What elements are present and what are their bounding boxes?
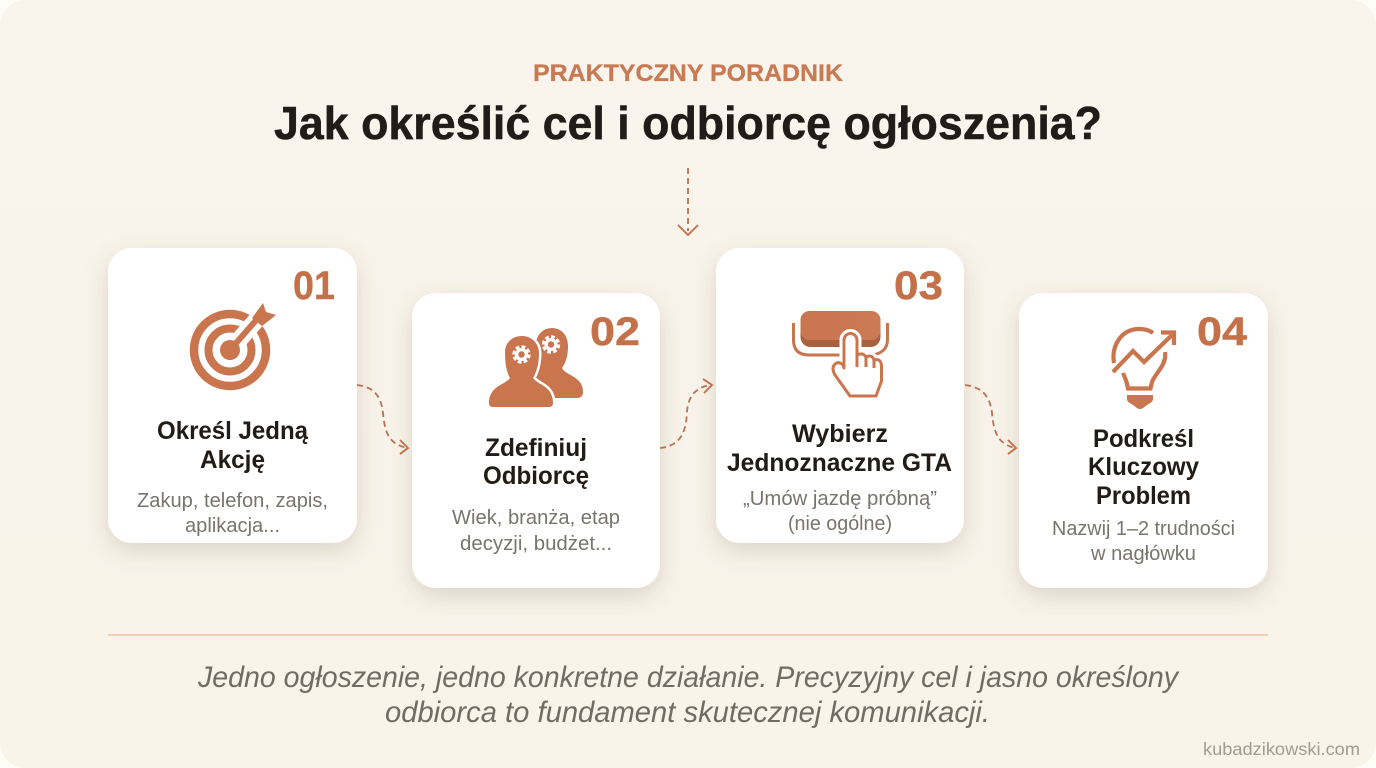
panel: step 04 xyxy=(1019,293,1268,588)
step heading: Określ Jedną xyxy=(157,417,309,445)
step description: „Umów jazdę próbną” xyxy=(743,488,937,510)
step description xyxy=(1052,518,1235,565)
step heading: Akcję xyxy=(200,446,265,474)
panel: step 01 xyxy=(108,248,357,543)
step heading xyxy=(157,417,309,474)
icon: light bulb with growth arrow xyxy=(1113,329,1174,409)
step description: (nie ogólne) xyxy=(788,513,892,535)
step heading: Kluczowy xyxy=(1088,453,1199,481)
icon: hand pressing button xyxy=(794,311,888,396)
step heading: Zdefiniuj xyxy=(485,434,587,462)
arrow: step 01 to 02 xyxy=(357,385,408,454)
step number 01: 01 xyxy=(293,264,335,308)
step description xyxy=(137,490,328,537)
closing statement: Jedno ogłoszenie, jedno konkretne działanie. Precyzyjny cel i jasno określony xyxy=(197,661,1180,694)
panel: step 02 xyxy=(412,293,660,588)
gear: back head xyxy=(543,337,559,352)
step heading xyxy=(483,434,589,490)
arrow: step 03 to 04 xyxy=(965,385,1016,454)
step description xyxy=(452,507,620,555)
step heading xyxy=(727,420,952,477)
step description: aplikacja... xyxy=(185,515,280,537)
step description: Zakup, telefon, zapis, xyxy=(137,490,328,512)
panel: step 03 xyxy=(716,248,964,543)
step heading: Wybierz xyxy=(792,420,888,448)
arrow: title to steps xyxy=(678,168,698,235)
step heading: Jednoznaczne GTA xyxy=(727,449,952,477)
step number 04: 04 xyxy=(1197,310,1248,354)
gear: front head xyxy=(514,347,529,362)
title: Jak określić cel i odbiorcę ogłoszenia? xyxy=(274,97,1102,149)
step description: Nazwij 1–2 trudności xyxy=(1052,518,1235,540)
eyebrow label: PRAKTYCZNY PORADNIK xyxy=(533,60,843,87)
closing statement xyxy=(197,661,1180,729)
icon: target with arrow xyxy=(194,303,276,386)
step description: w nagłówku xyxy=(1090,543,1196,565)
step description: Wiek, branża, etap xyxy=(452,507,620,529)
step heading xyxy=(1088,425,1199,510)
closing statement: odbiorca to fundament skutecznej komunikacji. xyxy=(385,696,990,729)
arrow: step 02 to 03 xyxy=(660,379,712,448)
step description: decyzji, budżet... xyxy=(460,533,612,555)
step number 03: 03 xyxy=(894,264,943,308)
step number 02: 02 xyxy=(590,310,640,354)
step heading: Podkreśl xyxy=(1093,425,1194,453)
website watermark: kubadzikowski.com xyxy=(1203,739,1360,759)
icon: two heads with gears xyxy=(489,328,583,407)
step description xyxy=(743,488,937,535)
step heading: Problem xyxy=(1096,482,1191,510)
step heading: Odbiorcę xyxy=(483,462,589,490)
